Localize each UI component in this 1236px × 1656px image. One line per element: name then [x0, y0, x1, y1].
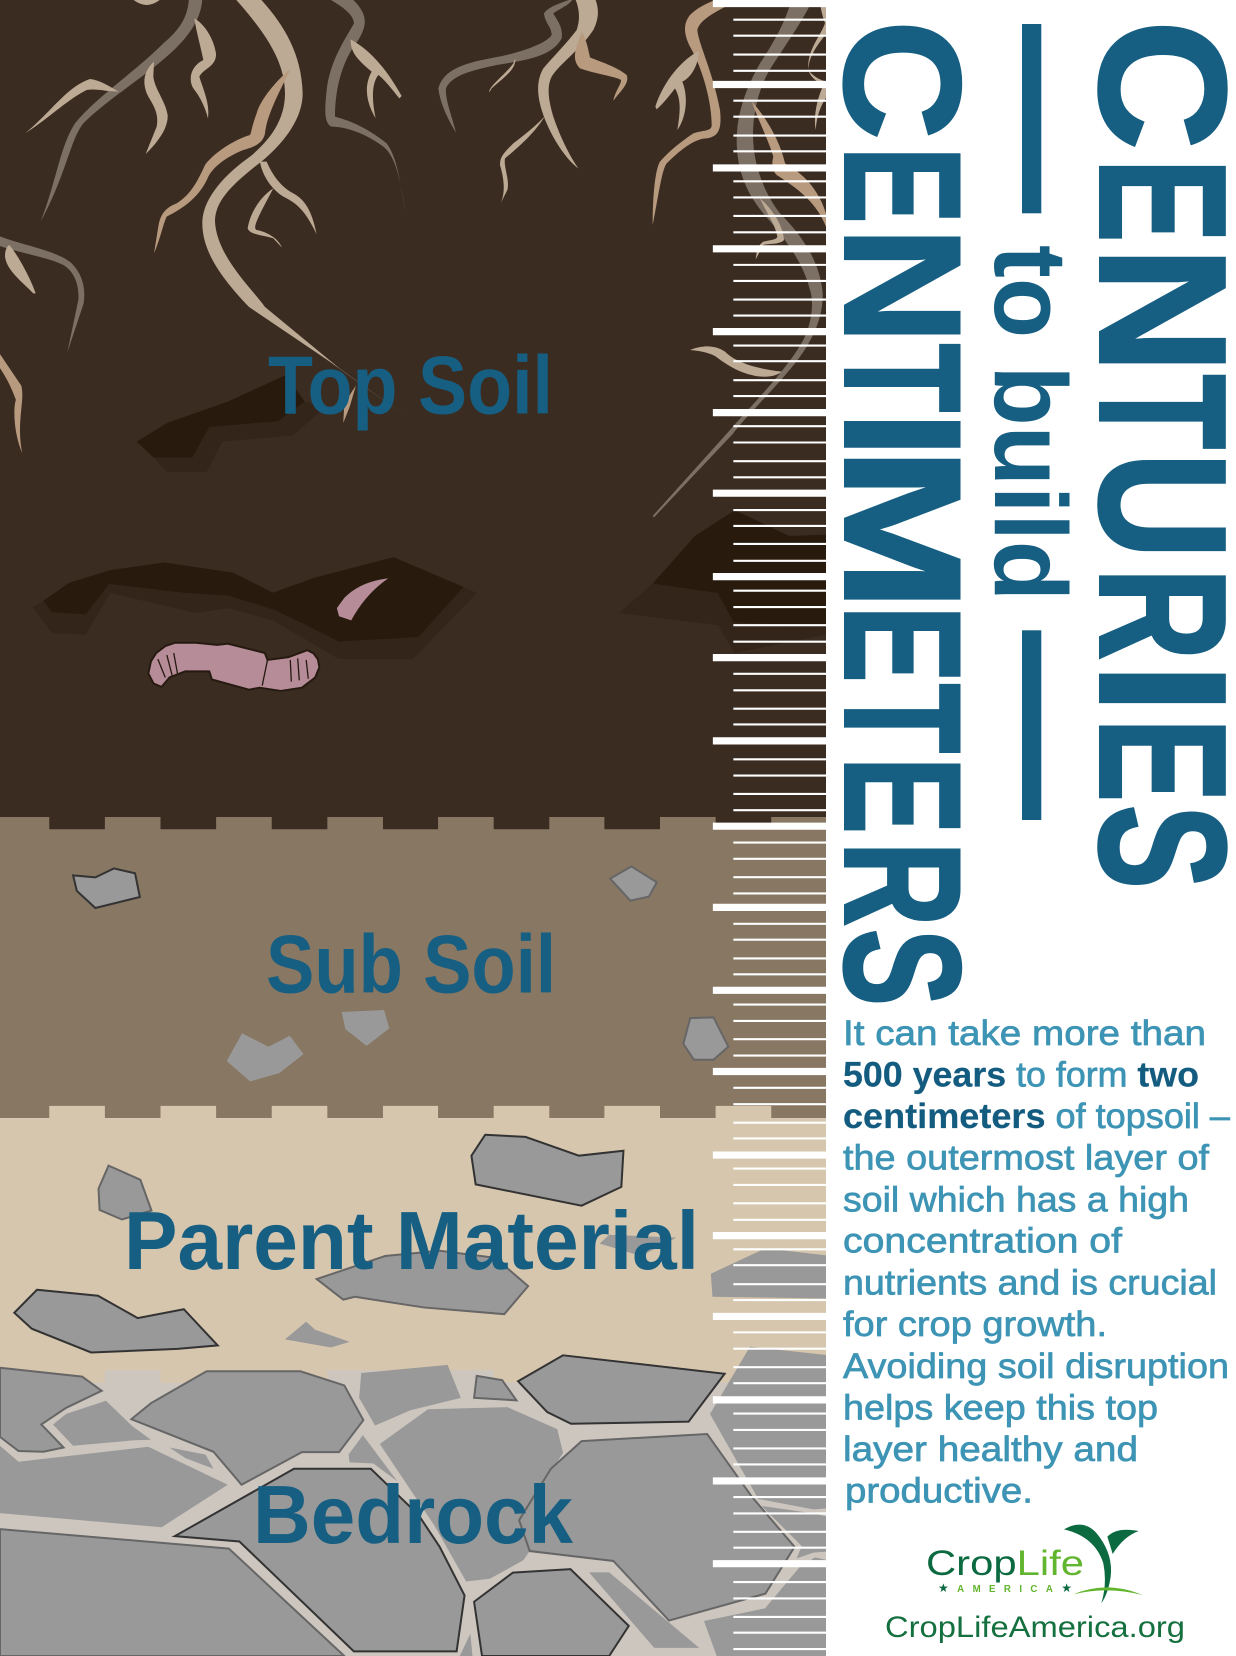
label: Top Soil: Top Soil — [268, 339, 553, 432]
website URL: CropLifeAmerica.org — [885, 1611, 1185, 1644]
title: CENTIMETERS: E — [810, 606, 994, 683]
title: CENTIMETERS — [809, 20, 995, 1006]
earthworm — [148, 578, 388, 691]
title: CENTIMETERS: C — [810, 20, 994, 140]
text block: explanation: It can take more than — [843, 1014, 1206, 1053]
title: CENTIMETERS: E — [810, 757, 994, 834]
panel: sub soil layer — [0, 817, 832, 1118]
panel: top soil layer — [0, 0, 830, 830]
text block: explanation: layer healthy and — [843, 1430, 1138, 1469]
title: CENTIMETERS: R — [810, 842, 994, 926]
title dash: lower — [1022, 630, 1041, 820]
panel: white text column — [826, 0, 1236, 1656]
title: CENTIMETERS: I — [810, 411, 994, 457]
text block: explanation: Avoiding soil disruption — [843, 1347, 1229, 1386]
roots: left cluster — [0, 0, 406, 416]
label: Parent Material: Parent Material — [124, 1194, 699, 1287]
title: CENTIMETERS: N — [810, 227, 995, 344]
logo subtitle: ★ AMERICA ★ — [938, 1581, 1072, 1595]
title: CENTIMETERS: T — [810, 344, 995, 412]
title: CENTIMETERS: M — [810, 447, 994, 611]
panel: soil hollows in top soil — [33, 375, 826, 659]
text block: explanation: the outermost layer of — [843, 1138, 1209, 1178]
title: CENTIMETERS: S — [810, 929, 994, 1006]
roots: far left and label-side tips — [0, 346, 356, 453]
panel: bedrock layer — [0, 1370, 832, 1656]
ruler ticks — [713, 0, 826, 1650]
text block: explanation: nutrients and is crucial — [843, 1264, 1217, 1303]
bedrock rocks at right edge — [704, 1347, 827, 1656]
roots: center cluster — [438, 0, 627, 203]
text block: explanation: helps keep this top — [843, 1389, 1158, 1428]
logo wordmark: Crop Life — [926, 1544, 1084, 1583]
logo: CropLife America — [926, 1525, 1143, 1603]
parent material and bedrock rocks — [0, 1135, 832, 1656]
text block: explanation: soil which has a high — [843, 1180, 1189, 1219]
title: CENTIMETERS: E — [810, 147, 994, 224]
text block: explanation: 500 years to form two — [843, 1055, 1199, 1094]
icon: sprout — [1064, 1525, 1143, 1603]
text block: explanation: centimeters of topsoil – — [843, 1097, 1231, 1136]
title dash: upper — [1022, 24, 1041, 213]
text block: explanation: productive. — [845, 1472, 1033, 1510]
panel: parent material layer — [0, 1106, 832, 1520]
label: Sub Soil: Sub Soil — [266, 918, 556, 1010]
sub soil rocks — [73, 866, 728, 1081]
text block: explanation: for crop growth. — [843, 1305, 1107, 1344]
title: CENTURIES — [1061, 20, 1236, 889]
text block: explanation — [843, 1014, 1231, 1510]
roots — [0, 0, 827, 517]
text block: explanation: concentration of — [843, 1222, 1122, 1261]
title: to build: to build — [973, 245, 1088, 601]
roots: right cluster behind ruler — [653, 0, 827, 517]
label: Bedrock: Bedrock — [253, 1468, 574, 1561]
title: CENTIMETERS: T — [809, 684, 993, 753]
